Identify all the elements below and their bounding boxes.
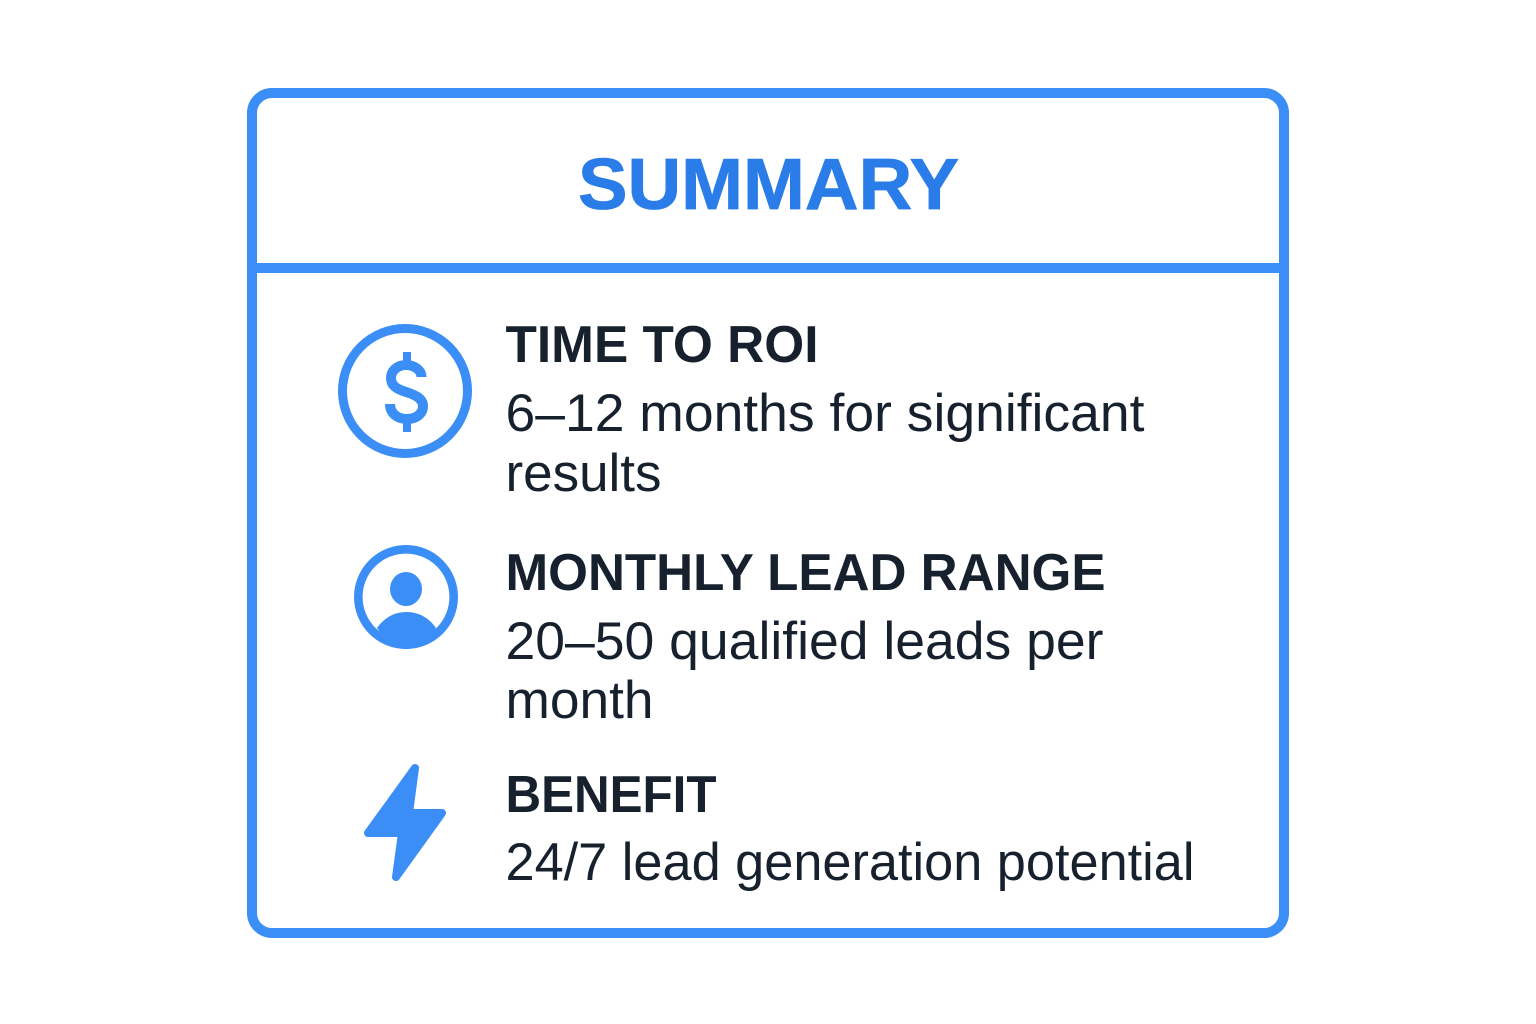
heading: monthly lead range: MONTHLY LEAD RANGE bbox=[506, 544, 1106, 602]
icon: lightning bolt bbox=[368, 768, 442, 877]
text: benefit value: 24/7 lead generation potential bbox=[506, 833, 1194, 892]
text: monthly lead range value: 20–50 qualified leads per bbox=[506, 612, 1104, 671]
row: monthly lead range bbox=[358, 544, 1106, 730]
icon: person in circle bbox=[358, 549, 454, 649]
title: SUMMARY bbox=[578, 145, 959, 225]
card border bbox=[252, 93, 1284, 933]
heading: benefit: BENEFIT bbox=[506, 766, 717, 824]
text: time to ROI value, second line: results bbox=[506, 444, 662, 503]
header divider bbox=[252, 263, 1284, 273]
text: time to ROI value: 6–12 months for significant bbox=[506, 384, 1145, 443]
icon: dollar coin bbox=[342, 328, 468, 454]
row: time to ROI bbox=[342, 316, 1145, 503]
row: benefit bbox=[368, 766, 1194, 892]
heading: time to ROI: TIME TO ROI bbox=[506, 316, 818, 374]
text: monthly lead range value, second line: month bbox=[506, 671, 654, 730]
